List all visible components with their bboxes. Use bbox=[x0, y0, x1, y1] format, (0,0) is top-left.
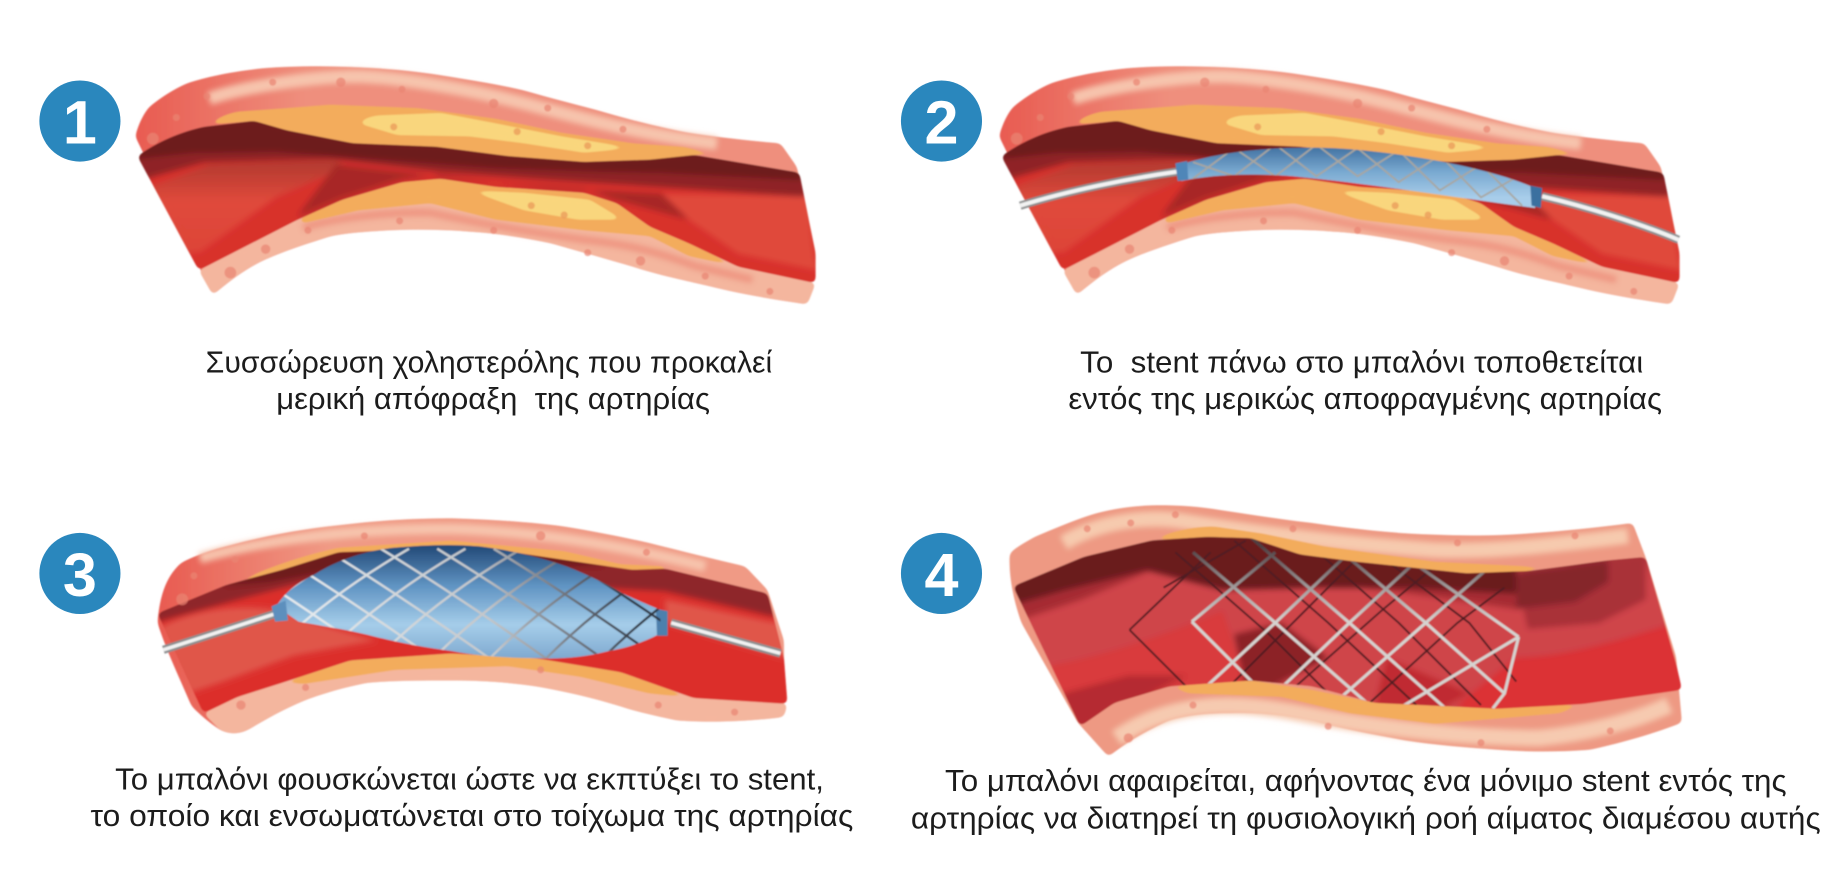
guide wire bbox=[1020, 172, 1678, 240]
caption: step 4: αρτηρίας να διατηρεί τη φυσιολογική ροή αίματος διαμέσου αυτής bbox=[911, 801, 1821, 835]
stent: front mesh bbox=[1192, 538, 1519, 709]
badge: number 3 bbox=[39, 533, 120, 614]
badge: number 1: 1 bbox=[63, 88, 97, 156]
badge: number 4 bbox=[901, 533, 982, 614]
caption: step 1: Συσσώρευση χοληστερόλης που προκαλεί bbox=[206, 346, 772, 380]
illustration: balloon inflated, stent expanding bbox=[141, 518, 799, 740]
cholesterol plaque bbox=[232, 541, 665, 585]
guide wire bbox=[163, 613, 780, 653]
caption: step 3: το οποίο και ενσωματώνεται στο τοίχωμα της αρτηρίας bbox=[91, 799, 853, 833]
badge: number 3: 3 bbox=[63, 541, 97, 609]
caption: step 4 bbox=[911, 764, 1821, 835]
caption: step 3: Το μπαλόνι φουσκώνεται ώστε να εκπτύξει το stent, bbox=[115, 763, 824, 797]
caption: step 2: Το stent πάνω στο μπαλόνι τοποθετείται bbox=[1080, 346, 1643, 380]
illustration: artery with permanent stent bbox=[999, 505, 1704, 757]
caption: step 2 bbox=[1068, 346, 1662, 416]
caption: step 1: μερική απόφραξη της αρτηρίας bbox=[276, 382, 710, 416]
panel: step 4 bbox=[901, 505, 1821, 835]
panel: step 1 bbox=[39, 66, 835, 416]
badge: number 4: 4 bbox=[924, 541, 958, 609]
stent mesh bbox=[283, 546, 662, 660]
thin plaque bbox=[1152, 526, 1552, 573]
caption: step 2: εντός της μερικώς αποφραγμένης αρτηρίας bbox=[1068, 382, 1662, 416]
balloon bbox=[1181, 148, 1535, 208]
inflated balloon bbox=[276, 545, 661, 658]
caption: step 4: Το μπαλόνι αφαιρείται, αφήνοντας ένα μόνιμο stent εντός της bbox=[945, 764, 1787, 798]
badge: number 2 bbox=[901, 80, 982, 162]
illustration: artery with stent on balloon bbox=[981, 66, 1698, 306]
caption: step 3 bbox=[91, 763, 853, 833]
stent: rear mesh bbox=[1130, 541, 1516, 709]
panel: step 2 bbox=[901, 66, 1698, 416]
badge: number 2: 2 bbox=[924, 88, 958, 156]
caption: step 1 bbox=[206, 346, 772, 416]
illustration: artery with cholesterol build-up bbox=[118, 66, 835, 306]
stent mesh bbox=[1193, 145, 1522, 206]
panel: step 3 bbox=[39, 518, 853, 833]
badge: number 1 bbox=[39, 80, 120, 162]
